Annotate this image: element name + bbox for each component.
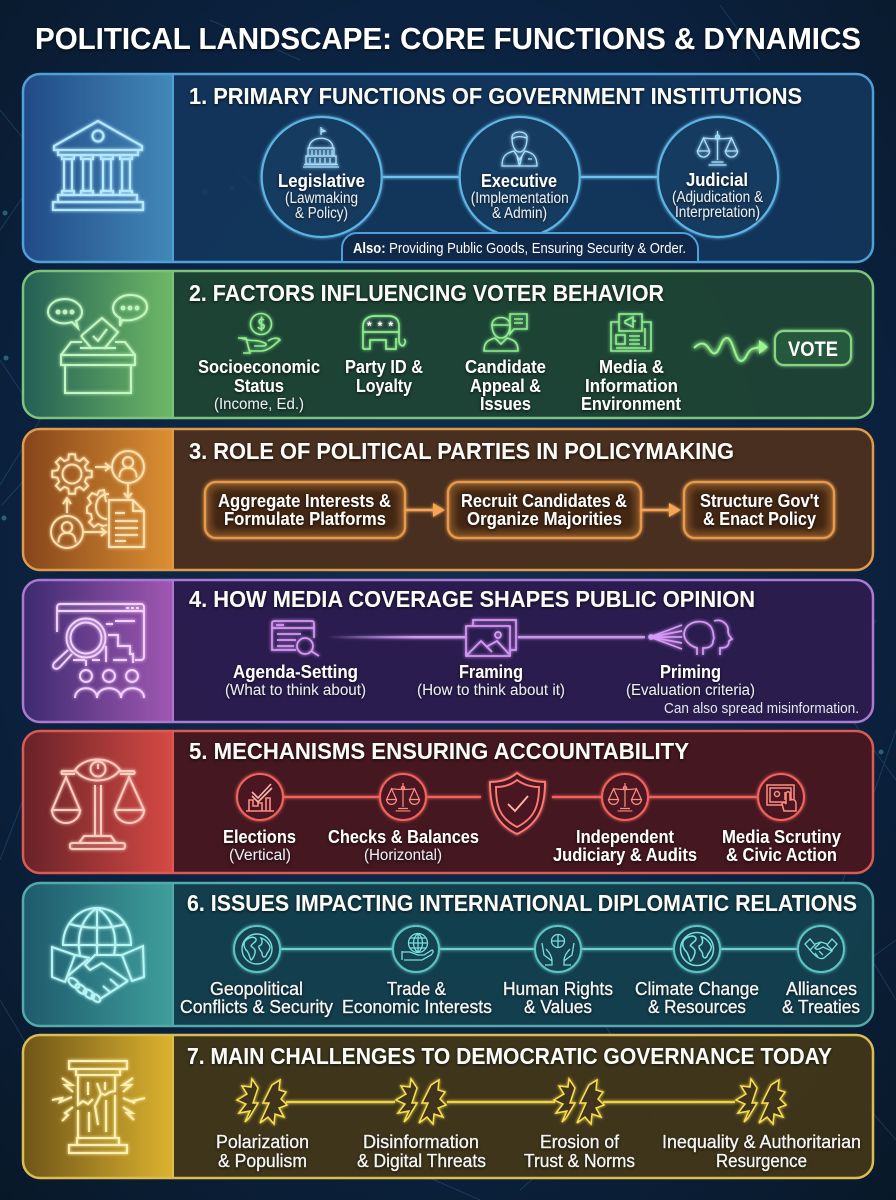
icon: globe and handshake bbox=[52, 908, 144, 1004]
text: candidate appeal: Issues bbox=[480, 394, 531, 414]
icon: elections chart with check bbox=[237, 774, 283, 820]
icon: balance scale in circle bbox=[380, 774, 426, 820]
item: party id bbox=[345, 316, 423, 396]
icon: agenda window with magnifier bbox=[272, 621, 319, 656]
text: alliances and treaties: & Treaties bbox=[782, 997, 860, 1017]
panel 1: primary functions of government institutions bbox=[23, 74, 873, 262]
icon: globe in hand bbox=[393, 926, 439, 972]
icon: hands holding globe bbox=[535, 926, 581, 972]
text: erosion of trust bbox=[524, 1132, 635, 1171]
connector lines bbox=[328, 636, 645, 638]
icon: screen with pointing hand bbox=[758, 774, 804, 820]
text: disinformation: & Digital Threats bbox=[357, 1151, 486, 1171]
text: socioeconomic status: Socioeconomic bbox=[198, 357, 320, 377]
panel 4: how media coverage shapes public opinion bbox=[23, 580, 873, 722]
panel 4 background bbox=[23, 580, 873, 722]
text: judicial: Judicial bbox=[686, 170, 748, 190]
panel 5 background bbox=[23, 731, 873, 873]
panel 7: main challenges to democratic governance today bbox=[23, 1035, 873, 1178]
item: disinformation bbox=[357, 1079, 486, 1171]
text: agenda-setting: (What to think about) bbox=[225, 682, 366, 699]
text: socioeconomic status: Status bbox=[234, 376, 284, 396]
text: media environment: Media & bbox=[599, 357, 664, 377]
text: media environment bbox=[581, 357, 681, 414]
heading 7: 7. MAIN CHALLENGES TO DEMOCRATIC GOVERNANCE TODAY bbox=[187, 1043, 832, 1069]
icon: earth in circle bbox=[234, 926, 280, 972]
text: framing: (How to think about it) bbox=[417, 682, 565, 699]
text: independent judiciary: Judiciary & Audits bbox=[553, 845, 697, 865]
text: trade and economic interests: Trade & bbox=[387, 979, 446, 999]
text: polarization: Polarization bbox=[216, 1132, 309, 1152]
text: trade and economic interests bbox=[342, 979, 492, 1017]
text: human rights and values: Human Rights bbox=[503, 979, 613, 999]
panel 2 background bbox=[23, 271, 873, 418]
icon: parties process diagram bbox=[51, 451, 144, 548]
heading 3: 3. ROLE OF POLITICAL PARTIES IN POLICYMAKING bbox=[189, 438, 734, 464]
text: executive bbox=[471, 171, 569, 222]
item: inequality and authoritarian resurgence bbox=[662, 1079, 861, 1171]
text: climate change and resources bbox=[635, 979, 759, 1017]
icon: candidate with speech bubble bbox=[484, 314, 527, 351]
item: geopolitical conflicts bbox=[180, 926, 333, 1017]
icon: executive person bbox=[502, 132, 537, 166]
text: media scrutiny: & Civic Action bbox=[726, 845, 837, 865]
text: elections: Elections bbox=[223, 827, 296, 847]
text: agenda-setting bbox=[225, 662, 366, 699]
text: climate change and resources: & Resources bbox=[648, 997, 746, 1017]
icon: ballot box bbox=[48, 295, 147, 393]
item: media environment bbox=[581, 314, 681, 414]
box: aggregate interests: Formulate Platforms bbox=[224, 509, 386, 529]
item: independent judiciary bbox=[553, 774, 697, 865]
text: candidate appeal bbox=[465, 357, 546, 414]
icon: lightning burst bbox=[736, 1079, 786, 1124]
text: priming: Priming bbox=[660, 662, 721, 682]
text: erosion of trust: Trust & Norms bbox=[524, 1151, 635, 1171]
badge: vote bbox=[775, 331, 851, 365]
text: executive: & Admin) bbox=[492, 205, 547, 222]
text: legislative: Legislative bbox=[278, 171, 365, 191]
arrow: wave to vote bbox=[694, 338, 768, 361]
box: recruit candidates bbox=[448, 482, 641, 538]
text: socioeconomic status: (Income, Ed.) bbox=[214, 396, 304, 413]
heading 1: 1. PRIMARY FUNCTIONS OF GOVERNMENT INSTITUTIONS bbox=[189, 83, 802, 109]
text: priming: (Evaluation criteria) bbox=[626, 682, 755, 699]
text: judicial bbox=[672, 170, 764, 221]
item: checks and balances bbox=[328, 774, 479, 864]
icon: lightning burst bbox=[554, 1079, 604, 1124]
text: judicial: (Adjudication & bbox=[672, 189, 764, 206]
text: checks and balances: Checks & Balances bbox=[328, 827, 479, 847]
text: candidate appeal: Appeal & bbox=[470, 376, 541, 396]
connector lines bbox=[283, 796, 758, 798]
text: socioeconomic status bbox=[198, 357, 320, 413]
text: media scrutiny: Media Scrutiny bbox=[722, 827, 841, 847]
box: structure government: Structure Gov't bbox=[700, 491, 819, 511]
text: climate change and resources: Climate Change bbox=[635, 979, 759, 999]
arrow: second step bbox=[641, 503, 681, 517]
panel 7 background bbox=[23, 1035, 873, 1178]
text: party id: Party ID & bbox=[345, 357, 423, 377]
text: polarization: & Populism bbox=[218, 1151, 307, 1171]
heading 2: 2. FACTORS INFLUENCING VOTER BEHAVIOR bbox=[189, 280, 664, 306]
connector lines bbox=[280, 948, 798, 950]
text: erosion of trust: Erosion of bbox=[540, 1132, 620, 1152]
icon: elephant: *** bbox=[367, 319, 393, 333]
item: polarization bbox=[216, 1079, 309, 1171]
text: legislative: & Policy) bbox=[295, 205, 348, 222]
text: agenda-setting: Agenda-Setting bbox=[233, 662, 358, 682]
text: judicial: Interpretation) bbox=[675, 204, 760, 221]
text: media scrutiny bbox=[722, 827, 841, 865]
title: POLITICAL LANDSCAPE: CORE FUNCTIONS & DYNAMICS bbox=[35, 21, 861, 56]
text: legislative: (Lawmaking bbox=[285, 190, 358, 207]
text: disinformation: Disinformation bbox=[363, 1132, 479, 1152]
text: party id bbox=[345, 357, 423, 396]
text: human rights and values: & Values bbox=[524, 997, 592, 1017]
connector lines bbox=[286, 1101, 735, 1103]
item: socioeconomic status bbox=[198, 314, 320, 413]
text: polarization bbox=[216, 1132, 309, 1171]
heading 4: 4. HOW MEDIA COVERAGE SHAPES PUBLIC OPINION bbox=[189, 586, 755, 612]
icon: framed picture bbox=[466, 620, 516, 656]
text: geopolitical conflicts: Geopolitical bbox=[210, 979, 303, 999]
item: agenda-setting bbox=[225, 621, 366, 699]
panel 1 background bbox=[23, 74, 873, 262]
callout: also: Also: Providing Public Goods, Ensuring Security & Order. bbox=[353, 241, 686, 257]
panel 3 background bbox=[23, 429, 873, 570]
text: alliances and treaties bbox=[782, 979, 860, 1017]
icon: earth in circle bbox=[674, 926, 720, 972]
text: executive: (Implementation bbox=[471, 190, 569, 207]
text: elections: (Vertical) bbox=[229, 847, 291, 864]
panel 3: role of political parties in policymaking bbox=[23, 429, 873, 570]
icon: hand with coin bbox=[238, 314, 280, 353]
text: geopolitical conflicts: Conflicts & Security bbox=[180, 997, 333, 1017]
node: executive bbox=[460, 117, 580, 237]
box: structure government bbox=[684, 482, 834, 538]
text: inequality and authoritarian resurgence bbox=[662, 1132, 861, 1171]
icon: cracked pillar bbox=[52, 1061, 145, 1153]
box: aggregate interests: Aggregate Interests & bbox=[218, 491, 391, 511]
connector lines bbox=[382, 176, 658, 178]
node: legislative bbox=[262, 117, 382, 237]
text: inequality and authoritarian resurgence: Inequality & Authoritarian bbox=[662, 1132, 861, 1152]
text: framing bbox=[417, 662, 565, 699]
icon: lightning burst bbox=[396, 1079, 446, 1124]
text: disinformation bbox=[357, 1132, 486, 1171]
icon: scale with eye bbox=[52, 760, 144, 849]
box: structure government: & Enact Policy bbox=[703, 509, 816, 529]
text: independent judiciary: Independent bbox=[576, 827, 674, 847]
item: trade and economic interests bbox=[342, 926, 492, 1017]
text: priming bbox=[626, 662, 755, 699]
item: candidate appeal bbox=[465, 314, 546, 414]
icon: government building bbox=[53, 121, 143, 210]
icon: priming heads bbox=[649, 620, 732, 655]
text: trade and economic interests: Economic Interests bbox=[342, 997, 492, 1017]
text: media environment: Environment bbox=[581, 394, 681, 414]
box: recruit candidates: Organize Majorities bbox=[467, 509, 622, 529]
icon: capitol bbox=[303, 127, 339, 167]
text: party id: Loyalty bbox=[356, 376, 412, 396]
icon: media analysis bbox=[53, 604, 144, 698]
note: misinformation: Can also spread misinformation. bbox=[664, 701, 859, 717]
text: human rights and values bbox=[503, 979, 613, 1017]
panel 5: mechanisms ensuring accountability bbox=[23, 731, 873, 873]
callout: also bbox=[342, 233, 698, 262]
item: erosion of trust bbox=[524, 1079, 635, 1171]
icon: media newspaper bbox=[611, 314, 651, 351]
panel 2: factors influencing voter behavior bbox=[23, 271, 873, 418]
text: inequality and authoritarian resurgence: Resurgence bbox=[716, 1151, 807, 1171]
item: media scrutiny bbox=[722, 774, 841, 865]
item: elections bbox=[223, 774, 296, 864]
item: framing bbox=[417, 620, 565, 699]
icon: judiciary scale in circle bbox=[602, 774, 648, 820]
text: candidate appeal: Candidate bbox=[465, 357, 546, 377]
text: checks and balances: (Horizontal) bbox=[364, 847, 442, 864]
box: recruit candidates: Recruit Candidates & bbox=[461, 491, 627, 511]
text: alliances and treaties: Alliances bbox=[786, 979, 857, 999]
icon: handshake in circle bbox=[798, 926, 844, 972]
text: checks and balances bbox=[328, 827, 479, 864]
item: priming bbox=[626, 620, 755, 699]
text: elections bbox=[223, 827, 296, 864]
item: climate change and resources bbox=[635, 926, 759, 1017]
panel 6 background bbox=[23, 883, 873, 1026]
text: geopolitical conflicts bbox=[180, 979, 333, 1017]
heading 5: 5. MECHANISMS ENSURING ACCOUNTABILITY bbox=[189, 738, 689, 764]
text: independent judiciary bbox=[553, 827, 697, 865]
text: legislative bbox=[278, 171, 365, 222]
icon: lightning burst bbox=[237, 1079, 287, 1124]
panel 6: issues impacting international diplomatic relations bbox=[23, 883, 873, 1026]
text: executive: Executive bbox=[481, 171, 557, 191]
arrow: first step bbox=[405, 503, 445, 517]
item: alliances and treaties bbox=[782, 926, 860, 1017]
text: framing: Framing bbox=[459, 662, 523, 682]
node: judicial bbox=[658, 117, 778, 237]
badge: vote: VOTE bbox=[788, 338, 838, 361]
icon: scales of justice bbox=[698, 131, 738, 165]
text: media environment: Information bbox=[585, 376, 678, 396]
box: aggregate interests bbox=[205, 482, 405, 538]
icon: shield with checkmark bbox=[490, 773, 545, 834]
item: human rights and values bbox=[503, 926, 613, 1017]
